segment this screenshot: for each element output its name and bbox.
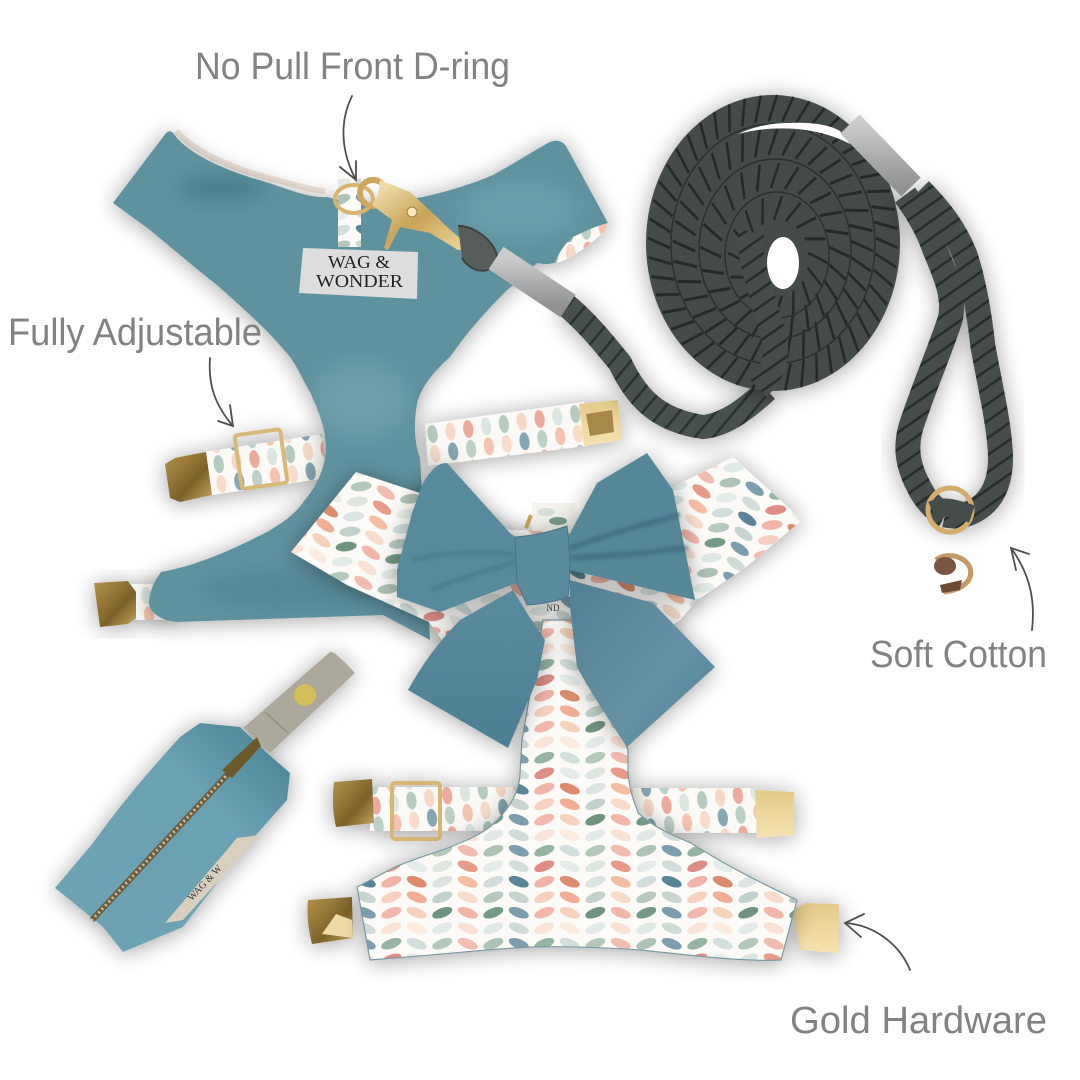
bow left wing: [397, 463, 517, 612]
caption: gold hardware: Gold Hardware: [790, 1000, 1047, 1042]
brand label: [299, 248, 418, 299]
pouch snap: [294, 684, 316, 706]
rope knot at snap hook: [458, 226, 497, 271]
print reversible panel: [291, 457, 802, 655]
bow knot: [515, 526, 570, 605]
upper left strap with buckle: [165, 429, 326, 502]
pouch label: [165, 835, 260, 923]
harness lining trim at the neck: [176, 131, 325, 191]
caption: no pull front D-ring: No Pull Front D-ring: [195, 46, 510, 88]
brand label: WONDER: [316, 271, 403, 291]
strap above bow knot with ring: [526, 503, 575, 531]
handle loop rope: [905, 190, 1000, 516]
arrow: soft cotton: [1011, 548, 1033, 630]
hidden label text: ND: [546, 603, 560, 613]
right arm hole lining: [555, 223, 608, 263]
gap between outer coil and inner rings: [738, 123, 850, 144]
silver leash sleeve at handle: [850, 124, 911, 187]
pouch zipper: [92, 747, 253, 920]
arrow: no pull front D-ring: [340, 96, 356, 180]
caption: fully adjustable: Fully Adjustable: [8, 312, 262, 354]
pouch leather tab: [243, 652, 355, 753]
bow left tail: [408, 590, 545, 748]
arrow: fully adjustable: [210, 358, 233, 426]
gold ring and charm: [928, 488, 972, 593]
caption: soft cotton: Soft Cotton: [870, 634, 1047, 676]
upper right strap with buckle: [425, 400, 622, 466]
leash rope from harness to coil: [565, 304, 767, 427]
silver leash sleeve near hook: [496, 258, 568, 306]
treat pouch: [55, 652, 355, 952]
coiled rope: [639, 84, 907, 402]
blue velvet harness: [113, 131, 608, 640]
arrow: gold hardware: [845, 914, 910, 970]
lower print harness straps: [308, 779, 839, 953]
pouch label: WAG & W: [186, 863, 225, 903]
bow right tail: [570, 580, 715, 747]
coil hole: [767, 237, 799, 289]
lower strap and buckle of blue harness: [94, 581, 172, 627]
velvet sailor bow: [397, 453, 715, 748]
brand label: WAG &: [328, 252, 390, 272]
pouch body: [55, 723, 290, 952]
print centre strap: [338, 175, 361, 247]
lower print harness body: [357, 620, 797, 960]
gold D-ring and snap hook: [335, 180, 473, 250]
bow right wing: [568, 453, 695, 600]
